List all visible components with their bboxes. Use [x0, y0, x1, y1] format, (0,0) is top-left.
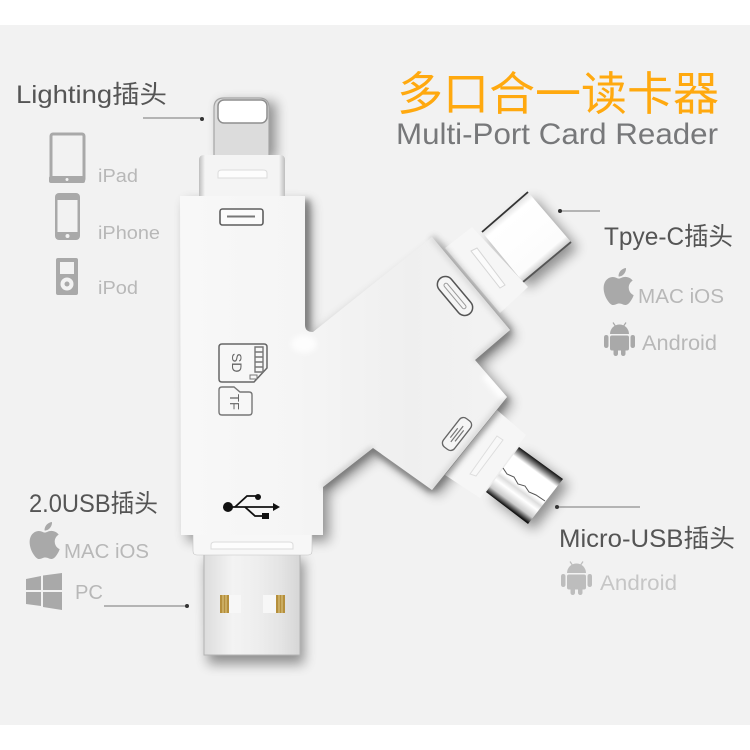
lightning heading: Lighting插头 — [16, 81, 167, 109]
lightning collar slot — [218, 170, 267, 178]
callout: micro-usb — [555, 505, 735, 595]
usb leader line — [104, 604, 189, 608]
label: iphone: iPhone — [98, 223, 160, 243]
micro-usb plug — [486, 447, 563, 524]
icon: apple — [30, 522, 60, 559]
usb heading: 2.0USB插头 — [29, 490, 158, 518]
label: ipod: iPod — [98, 278, 138, 298]
usb collar — [193, 533, 312, 555]
title: English subheading: Multi-Port Card Reader — [396, 118, 718, 151]
tf card icon — [219, 387, 252, 415]
icon: ipad — [49, 134, 85, 183]
micro-usb collar slot — [470, 436, 503, 476]
label: android: Android — [600, 572, 677, 595]
callout: type-c — [558, 209, 733, 356]
label: pc: PC — [75, 582, 103, 604]
icon: apple — [604, 268, 634, 305]
usb contacts — [220, 595, 285, 613]
title: Chinese heading: 多口合一读卡器 — [397, 68, 719, 120]
type-c leader line — [558, 209, 600, 213]
body contact shadows — [306, 200, 510, 490]
type-c connector — [445, 192, 571, 313]
label: mac ios: MAC iOS — [638, 286, 724, 308]
label: ipad: iPad — [98, 166, 138, 186]
micro-usb seam — [503, 468, 545, 501]
type-c port icon — [434, 273, 476, 319]
micro-usb leader line — [555, 505, 640, 509]
lightning port icon — [220, 209, 263, 225]
type-c heading: Tpye-C插头 — [604, 223, 733, 251]
callout: usb 2.0 — [26, 490, 189, 610]
micro-usb heading: Micro-USB插头 — [559, 525, 735, 553]
lightning plug window — [218, 100, 267, 123]
icon: windows — [26, 573, 62, 610]
body edge shading — [218, 238, 558, 515]
callout: lightning — [16, 81, 204, 298]
sd card icon: SD — [229, 353, 245, 372]
type-c plug — [482, 192, 571, 282]
usb plug metal — [204, 553, 300, 655]
micro-usb connector — [445, 410, 563, 524]
icon: ipod — [56, 258, 78, 295]
usb collar slot — [211, 542, 293, 549]
title — [396, 68, 719, 151]
lightning leader line — [143, 117, 204, 121]
usb trident icon — [223, 494, 280, 519]
tf card icon: TF — [227, 394, 242, 410]
usb-a connector — [193, 533, 312, 655]
label: mac ios: MAC iOS — [64, 541, 149, 563]
micro-usb port icon — [440, 416, 474, 452]
type-c collar slot — [471, 248, 505, 288]
lightning connector — [199, 98, 285, 198]
type-c collar — [445, 227, 528, 313]
lightning plug metal — [214, 98, 269, 158]
device shadows — [186, 102, 578, 664]
label: android: Android — [642, 332, 717, 355]
icon: iphone — [55, 193, 80, 240]
device body — [180, 196, 510, 535]
lightning collar — [199, 155, 285, 198]
icon: android — [604, 322, 635, 356]
card reader device — [180, 98, 578, 664]
icon: android — [561, 562, 592, 595]
micro-usb collar — [445, 410, 526, 498]
sd card icon — [219, 344, 267, 382]
